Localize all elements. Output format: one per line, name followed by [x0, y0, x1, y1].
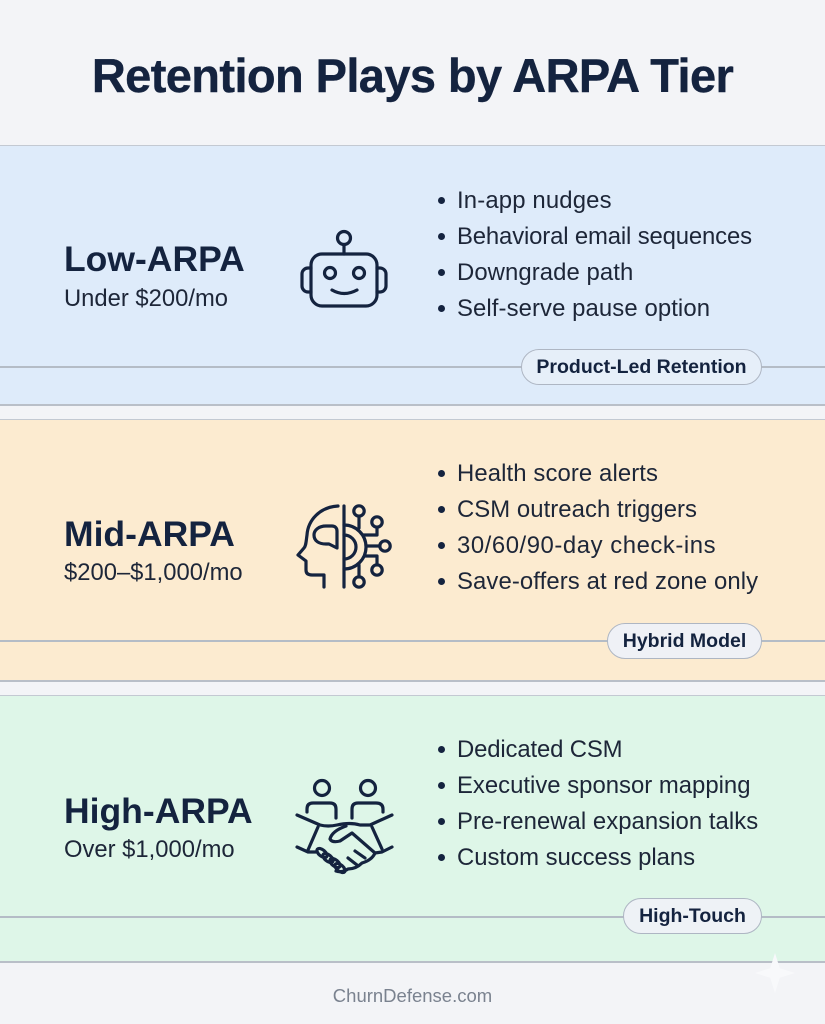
- pill: Hybrid Model: Hybrid Model: [623, 630, 746, 652]
- bullet list: low: [438, 187, 752, 322]
- icon: AI head: [296, 504, 392, 589]
- icon: sparkle watermark: [772, 954, 778, 963]
- bullet list: low: In-app nudges: [457, 187, 612, 214]
- bullet list: mid: 30/60/90-day check-ins: [457, 532, 716, 559]
- bullet list: mid: CSM outreach triggers: [457, 496, 697, 523]
- tier range: low: Under $200/mo: [64, 285, 228, 312]
- bullet list: low: Downgrade path: [457, 259, 633, 286]
- panel: mid-ARPA: [0, 419, 825, 682]
- tier name: High-ARPA: High-ARPA: [64, 791, 253, 831]
- bullet list: high: Dedicated CSM: [457, 736, 622, 763]
- pill: High-Touch: [623, 898, 762, 934]
- footer: ChurnDefense.com: [333, 985, 492, 1006]
- bullet list: mid: [438, 460, 758, 595]
- icon: handshake: [295, 778, 394, 874]
- bullet list: high: Executive sponsor mapping: [457, 772, 750, 799]
- panel: low-ARPA: [0, 145, 825, 406]
- panel: high-ARPA: [0, 695, 825, 963]
- bullet list: high: [438, 736, 758, 871]
- pill: Product-Led Retention: Product-Led Retention: [536, 356, 747, 378]
- pill: High-Touch: High-Touch: [639, 905, 746, 927]
- tier name: Mid-ARPA: Mid-ARPA: [64, 514, 235, 554]
- bullet list: low: Self-serve pause option: [457, 295, 710, 322]
- icon: robot: [300, 230, 388, 308]
- tier range: high: Over $1,000/mo: [64, 836, 235, 863]
- tier range: mid: $200–$1,000/mo: [64, 559, 243, 586]
- pill: Hybrid Model: [607, 623, 762, 659]
- title: Retention Plays by ARPA Tier: [92, 49, 733, 102]
- bullet list: mid: Health score alerts: [457, 460, 658, 487]
- tier name: Low-ARPA: Low-ARPA: [64, 239, 245, 279]
- bullet list: high: Custom success plans: [457, 844, 695, 871]
- bullet list: mid: Save-offers at red zone only: [457, 568, 758, 595]
- pill: Product-Led Retention: [521, 349, 762, 385]
- bullet list: high: Pre-renewal expansion talks: [457, 808, 758, 835]
- bullet list: low: Behavioral email sequences: [457, 223, 752, 250]
